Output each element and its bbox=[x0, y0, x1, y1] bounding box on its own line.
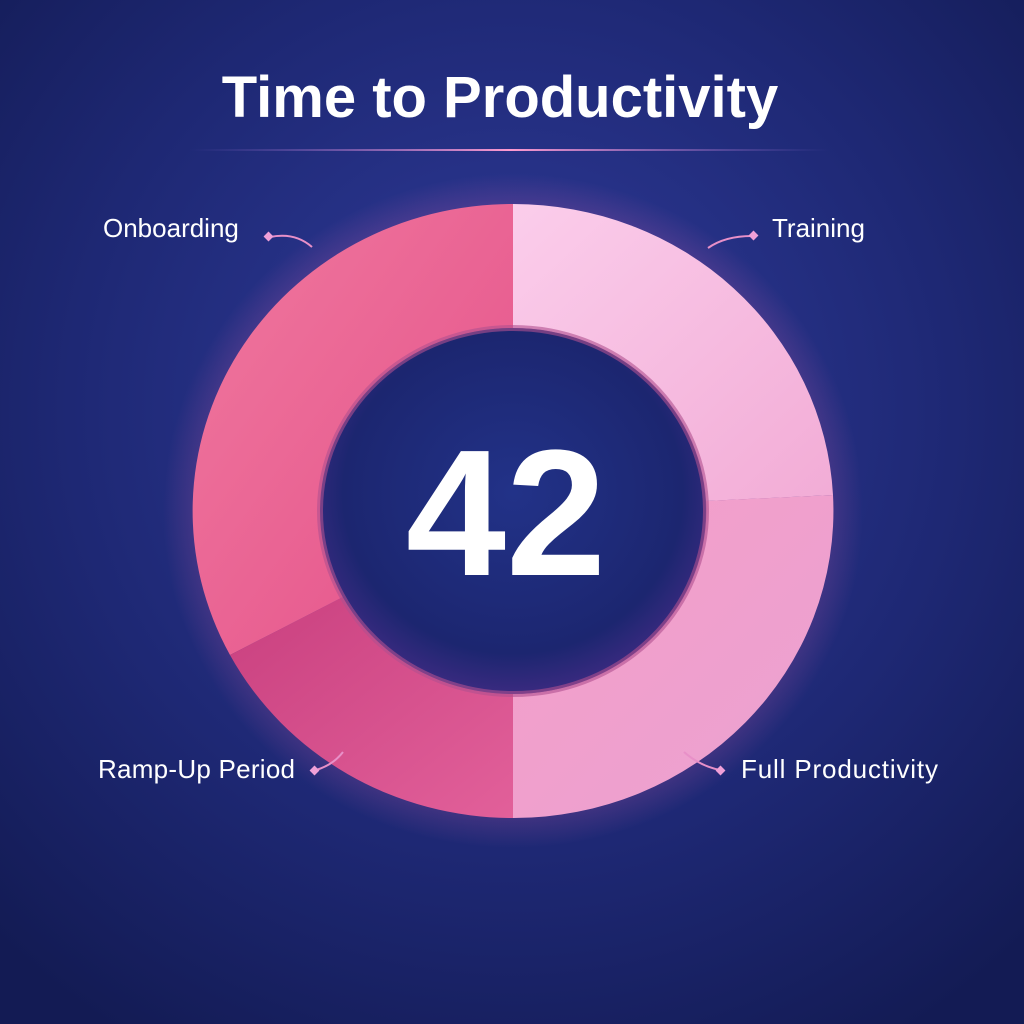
donut chart bbox=[163, 174, 863, 848]
label: onboarding: Onboarding bbox=[103, 213, 239, 243]
label: training bbox=[708, 213, 865, 248]
segment: onboarding bbox=[193, 204, 513, 655]
segment: full productivity bbox=[513, 495, 833, 818]
label: onboarding bbox=[103, 213, 312, 247]
label: full productivity: Full Productivity bbox=[741, 754, 938, 784]
label: training: Training bbox=[772, 213, 865, 243]
segment: training bbox=[513, 204, 833, 501]
label: ramp-up period: Ramp-Up Period bbox=[98, 754, 295, 784]
segment: ramp-up period bbox=[230, 597, 513, 818]
center value: 42 bbox=[406, 413, 606, 614]
title: Time to Productivity bbox=[222, 65, 778, 130]
